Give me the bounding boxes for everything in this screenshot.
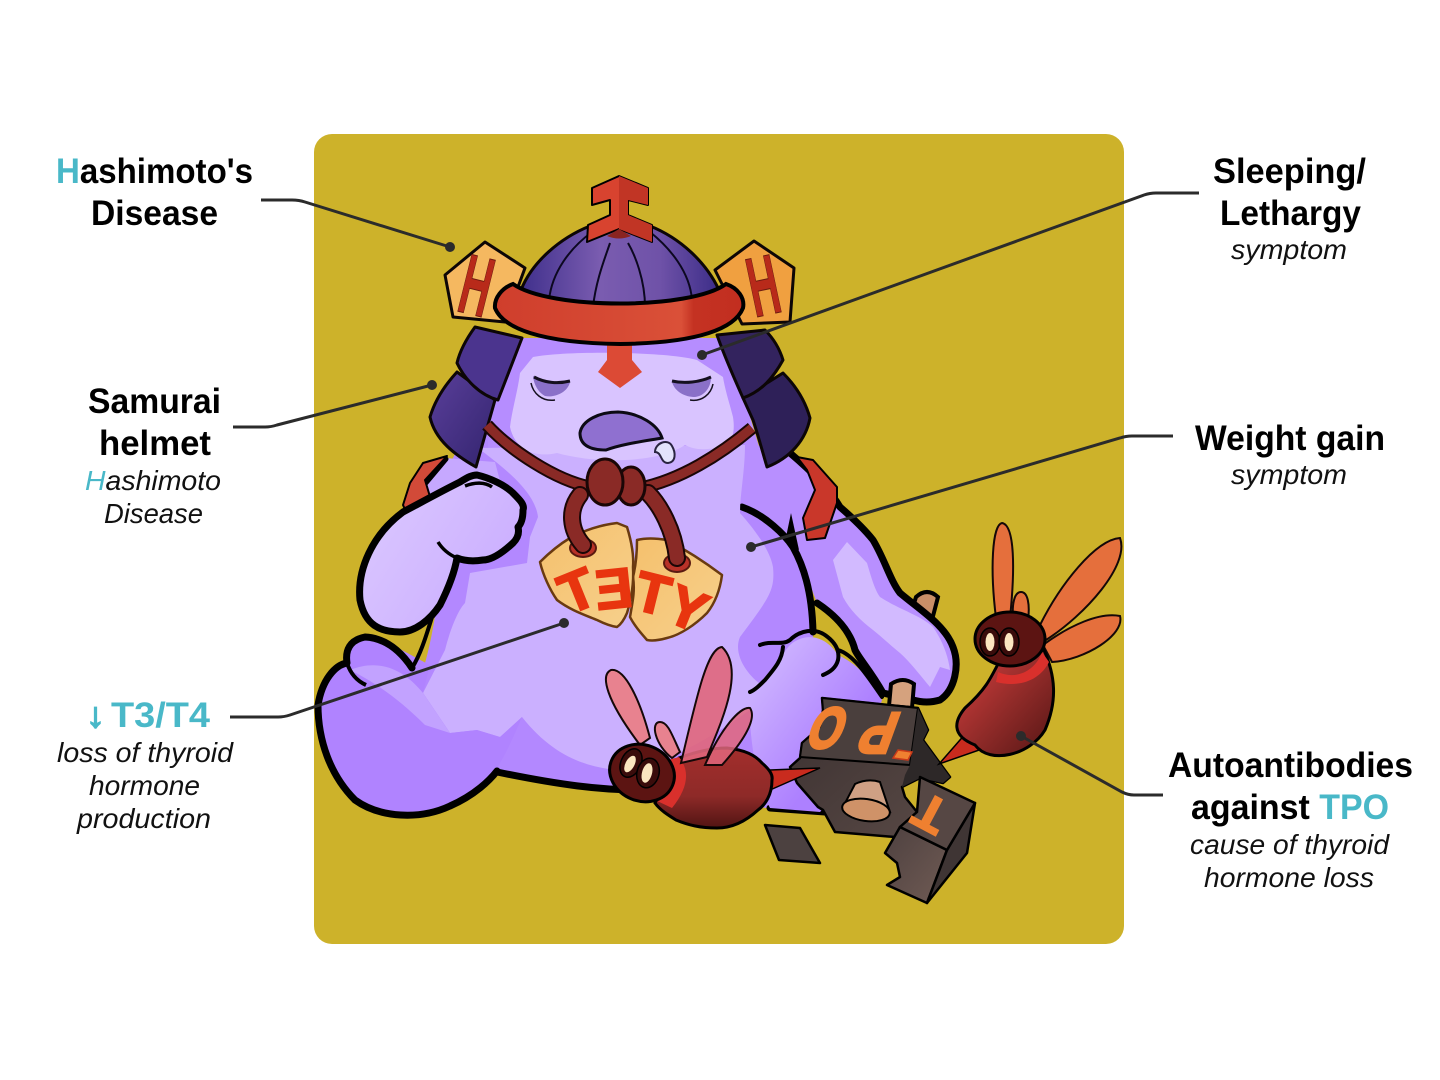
body: [420, 430, 850, 812]
label: Samurai helmet: [85, 382, 221, 529]
right ear plate with H: [715, 237, 794, 336]
label: T3/T4 down: [57, 696, 234, 834]
label: Samurai helmet: helmet: [99, 424, 211, 463]
stinger: [770, 768, 820, 790]
right ear plate with H: H: [739, 237, 788, 336]
block side: [902, 708, 950, 787]
neck band: [655, 757, 686, 808]
body: [957, 650, 1054, 756]
left shoulder strap: [403, 456, 447, 516]
label: T3/T4 down: production: [76, 803, 211, 834]
helmet brim: [495, 284, 743, 344]
forehead gem: [598, 342, 642, 388]
label: T3/T4 down: hormone: [89, 770, 200, 801]
label: Autoantibodies against TPO: hormone loss: [1204, 862, 1374, 893]
label: Samurai helmet: Disease: [104, 498, 203, 529]
drool: [655, 442, 675, 463]
label: Samurai helmet: Samurai: [88, 382, 221, 421]
label: Sleeping/Lethargy: [1213, 152, 1366, 265]
block top face: [800, 698, 918, 765]
head: [975, 612, 1045, 666]
connector: Sleeping to face: [697, 193, 1199, 360]
connector: Autoantibodies to bug: [1016, 731, 1163, 795]
body: [655, 748, 772, 828]
label: T3/T4 down: ↓: [86, 696, 105, 735]
rope necklace: [487, 425, 752, 488]
wings: [993, 523, 1121, 662]
label: Hashimoto's Disease: [56, 152, 253, 233]
label: T3/T4 down: T3/T4: [111, 696, 211, 735]
label: Autoantibodies against TPO: Autoantibodies: [1168, 746, 1413, 785]
right tag T Y: Y: [659, 572, 717, 645]
wings: [606, 670, 680, 758]
connector: T3/T4 to tags: [230, 618, 569, 717]
big cork: [841, 780, 891, 824]
top cork behind arm: [912, 592, 938, 620]
broken T piece: T: [904, 781, 957, 845]
stinger: [939, 732, 985, 764]
connector: Hashimoto's Disease to ear plate: [261, 200, 455, 252]
label: Sleeping/Lethargy: symptom: [1231, 234, 1347, 265]
label: Sleeping/Lethargy: Lethargy: [1220, 194, 1362, 233]
label: Weight gain: symptom: [1231, 459, 1347, 490]
left shoulder line: [420, 459, 446, 490]
left tag T 3: [540, 523, 636, 627]
left helmet flaps: [430, 327, 522, 467]
label: Samurai helmet: Hashimoto: [85, 465, 221, 496]
left shoulder: [415, 458, 505, 540]
panel: gold illustration background: [314, 134, 1124, 944]
face highlight: [510, 353, 734, 460]
label: Sleeping/Lethargy: Sleeping/: [1213, 152, 1366, 191]
small cork: [889, 680, 914, 708]
label: Hashimoto's Disease: Disease: [91, 194, 218, 233]
right shoulder strap: [797, 457, 837, 540]
label: T3/T4 down: loss of thyroid: [57, 737, 234, 768]
illustration: right antibody bug: [939, 523, 1121, 764]
illustration: broken TPO block: [765, 680, 975, 903]
left eye closed: [531, 376, 570, 400]
illustration: left antibody bug: [601, 647, 820, 828]
label: Weight gain: Weight gain: [1195, 419, 1385, 458]
letter fragment: [893, 750, 912, 760]
left ear plate with H: H: [450, 237, 502, 336]
right arm: [735, 440, 956, 702]
right tag T Y: [629, 538, 722, 645]
label: Hashimoto's Disease: Hashimoto's: [56, 152, 253, 191]
head: [488, 338, 760, 450]
connector: Samurai helmet to flap: [233, 380, 437, 427]
left foot: [318, 617, 522, 815]
right tag T Y: T: [629, 559, 677, 628]
broken T piece: [885, 777, 975, 903]
neck band: [996, 652, 1049, 684]
connector: Weight gain to belly: [746, 436, 1173, 552]
tag eyelets and hanging ropes: [570, 493, 690, 572]
illustration: sleepy purple samurai character: [318, 176, 956, 815]
left tag T 3: Ǝ: [592, 555, 636, 622]
left arm and fist: [360, 475, 523, 632]
helmet dome: [521, 226, 719, 307]
head: [601, 735, 683, 811]
belly highlight: [423, 445, 775, 772]
label: Autoantibodies against TPO: against TPO: [1191, 788, 1389, 827]
letter P on block: P: [850, 700, 908, 765]
right helmet flaps: [717, 330, 810, 467]
mouth: [580, 412, 662, 450]
label: Autoantibodies against TPO: [1168, 746, 1413, 893]
letter O on block: O: [799, 695, 857, 760]
rope knot: [587, 459, 645, 505]
right eye closed: [672, 377, 713, 400]
label: Weight gain: [1195, 419, 1385, 490]
helmet crest: [587, 176, 652, 242]
left tag T 3: T: [550, 555, 605, 626]
main block piece: [790, 698, 950, 837]
right foot: [750, 631, 882, 812]
chip: [765, 825, 820, 863]
label: Autoantibodies against TPO: cause of thyroid: [1190, 829, 1390, 860]
front wings: [681, 647, 752, 765]
